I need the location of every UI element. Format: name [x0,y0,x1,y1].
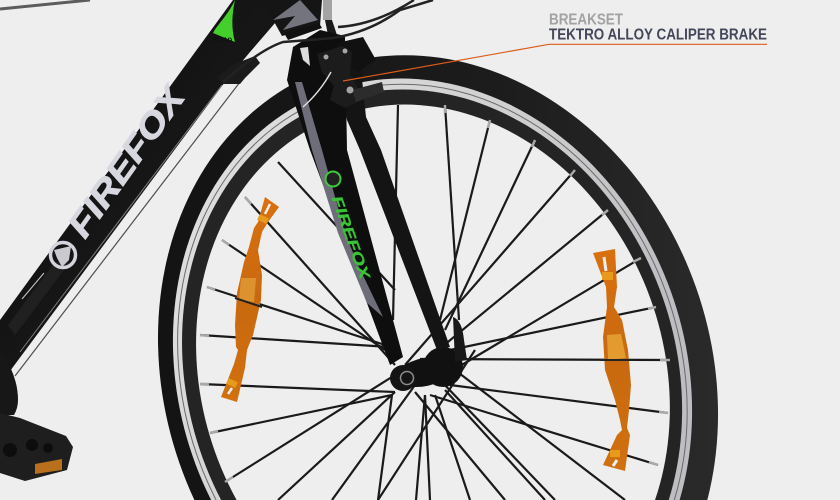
rim silver groove [178,84,687,500]
grey stripe [295,82,383,317]
bracket clips [602,272,620,457]
callout leader line [343,44,767,81]
fork [287,30,450,365]
white brake cable [303,72,331,107]
spoke over reflector [600,359,634,361]
callout category label: BREAKSET [549,11,624,28]
reflector bracket [221,197,279,402]
hub [390,317,467,392]
spokes [200,105,670,500]
caliper bolts [324,48,354,94]
spoke over reflector [235,298,262,307]
brake top plate [337,37,376,72]
firefox fork lettering: FIREFOX [328,194,373,283]
second fork blade [335,60,450,350]
fork logo [326,172,340,186]
spoke nipples [200,105,670,482]
left reflector [221,197,279,402]
reflector bracket [593,249,631,471]
pedal body [0,413,73,481]
caliper arm [317,46,362,108]
frame: down tube [0,0,275,385]
wheel opening [196,105,670,500]
callout: brakeset [343,11,767,81]
tube sheen [8,262,70,335]
callout value label: TEKTRO ALLOY CALIPER BRAKE [549,26,767,43]
firefox logo [50,242,76,268]
green road graphic [213,0,235,42]
stem base [325,20,338,40]
reflector highlight [607,334,626,360]
tube body [0,0,275,385]
firefox frame lettering: FIREFOX [61,78,194,245]
stem bolt [323,0,332,20]
bracket slots [604,257,617,466]
bracket slots [228,204,270,394]
pedal and crank [0,350,73,481]
tire [158,55,718,500]
cable stop [217,56,260,84]
caliper brake and cables [223,0,433,108]
road label: ROAD [213,36,233,44]
rim dark band [182,89,682,500]
crown glare [300,47,310,66]
left fork blade [287,30,403,365]
cables [223,0,433,82]
bracket clips [226,214,269,388]
head tube [262,0,338,40]
pedal studs [3,439,53,457]
front wheel [158,55,718,500]
top tube fragment [0,0,90,9]
chainring [0,350,18,415]
right reflector [593,249,634,471]
pedal reflector [35,459,62,474]
rim silver band [173,79,692,500]
tube glare line [22,273,44,299]
rear cable [15,82,240,376]
brake pad [352,82,384,102]
tube light edge [20,85,222,352]
reflector highlight [239,278,256,302]
